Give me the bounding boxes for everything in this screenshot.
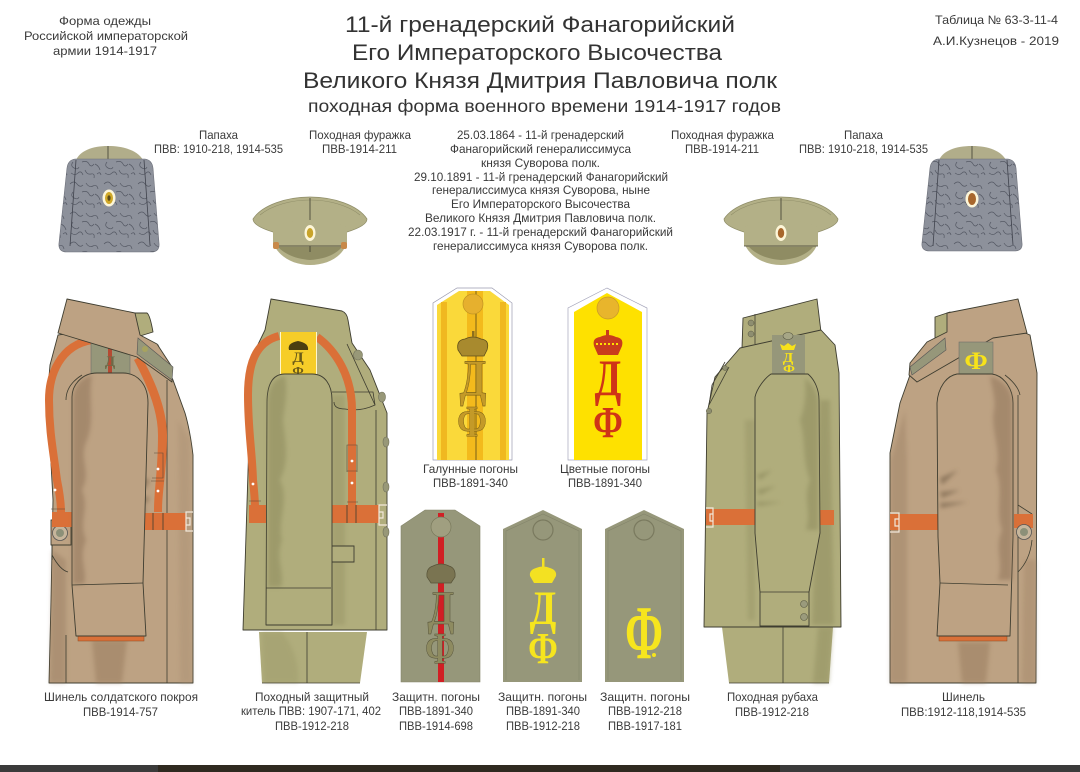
- caption: tunic: ПВВ-1912-218: [275, 719, 349, 733]
- shirt shading: [812, 400, 834, 625]
- label: papakha left: [154, 128, 283, 156]
- collar inner: [133, 313, 153, 336]
- caption: subdued board 3: [600, 690, 690, 733]
- caption: subdued board 2: Защитн. погоны: [498, 690, 587, 704]
- figure: field tunic: Д: [292, 350, 304, 366]
- tunic shading: [332, 395, 345, 625]
- epaulette: [772, 335, 805, 375]
- caption: subdued board 3: Защитн. погоны: [600, 690, 690, 704]
- belt buckle: [890, 513, 899, 532]
- regiment history text: генералиссимуса князя Суворова полк.: [433, 239, 648, 253]
- figure: field shirt: [704, 299, 841, 683]
- cypher: Д: [595, 350, 621, 406]
- belt buckle: [379, 505, 387, 525]
- label: field cap right: [671, 128, 774, 156]
- shoulder board: gold braid: Ф: [457, 396, 487, 446]
- button: [597, 297, 619, 319]
- label: field cap right: Походная фуражка: [671, 128, 774, 142]
- coat seams: [66, 375, 167, 683]
- shoulder board: subdued red stripe: Д: [428, 582, 454, 635]
- sleeve cuff orange: [939, 635, 1007, 641]
- caption: greatcoat right: Шинель: [942, 690, 985, 704]
- strap fittings: [51, 453, 164, 509]
- chest pocket: [332, 392, 375, 410]
- caption: subdued board 3: ПВВ-1917-181: [608, 719, 682, 733]
- back strap: [248, 336, 279, 507]
- caption: coloured board: Цветные погоны: [560, 462, 650, 476]
- tunic buttons: [354, 350, 389, 537]
- back strap: [49, 340, 92, 512]
- shoulder board: subdued red stripe: Ф: [425, 623, 455, 673]
- regiment history text: Его Императорского Высочества: [451, 197, 630, 211]
- caption: subdued board 1: [392, 690, 480, 733]
- title: [303, 12, 781, 116]
- label: field cap left: Походная фуражка: [309, 128, 411, 142]
- shoulder board: subdued yellow cypher: [503, 510, 582, 682]
- epaulette: [280, 332, 317, 375]
- caption: coloured board: [560, 462, 650, 490]
- epaulette: [959, 342, 993, 375]
- label: papakha right: [799, 128, 928, 156]
- figure: field tunic: Ф: [292, 364, 304, 377]
- sleeve: [755, 374, 820, 626]
- caption: braid board: [423, 462, 518, 490]
- sleeve shading: [268, 376, 286, 587]
- regiment history text: 29.10.1891 - 11-й гренадерский Фанагорийский: [414, 170, 668, 184]
- shoulder board: subdued yellow cypher: Д: [530, 582, 556, 635]
- bottom dark bar: [0, 765, 1080, 772]
- coat shading: [890, 410, 1036, 683]
- collar tab: [137, 338, 173, 380]
- rear flap: [1018, 505, 1032, 572]
- epaulette: [91, 342, 130, 376]
- label: field cap left: [309, 128, 411, 156]
- coat seams: [1005, 375, 1020, 683]
- caption: field shirt: Походная рубаха: [727, 690, 818, 704]
- caption: tunic: [241, 690, 381, 733]
- coat shading: [50, 420, 192, 683]
- caption: greatcoat left: ПВВ-1914-757: [83, 705, 158, 719]
- icon: field cap left: [253, 197, 367, 265]
- pocket flap and back button: [51, 520, 71, 572]
- header left: series caption: Форма одежды: [59, 14, 151, 28]
- collar: [742, 299, 821, 348]
- figure: field tunic: [243, 299, 389, 683]
- title: Великого Князя Дмитрия Павловича полк: [303, 68, 777, 93]
- lower pocket: [332, 546, 354, 562]
- caption: subdued board 1: ПВВ-1891-340: [399, 704, 473, 718]
- figure: field shirt: Ф: [783, 362, 795, 375]
- placket and buttons: [706, 362, 729, 414]
- regiment history text: [408, 128, 673, 253]
- tunic seams: [347, 344, 376, 630]
- regiment history text: Фанагорийский генералиссимуса: [450, 142, 631, 156]
- caption: subdued board 1: Защитн. погоны: [392, 690, 480, 704]
- shoulder board: gold braid: [433, 288, 512, 460]
- front strap: [317, 337, 352, 507]
- strap fittings: [249, 445, 358, 502]
- caption: subdued board 3: ПВВ-1912-218: [608, 704, 682, 718]
- shoulder board: subdued F cypher: [605, 510, 684, 682]
- shoulder board: subdued F cypher: Ф: [625, 592, 663, 675]
- figure: soldier greatcoat left: [47, 299, 193, 683]
- sleeve shading: [800, 378, 818, 530]
- regiment history text: князя Суворова полк.: [481, 156, 600, 170]
- crown: [594, 335, 622, 355]
- regiment history text: Великого Князя Дмитрия Павловича полк.: [425, 211, 656, 225]
- shoulder board: coloured: [568, 288, 647, 460]
- label: papakha right: ПВВ: 1910-218, 1914-535: [799, 142, 928, 156]
- caption: greatcoat left: Шинель солдатского покроя: [44, 690, 198, 704]
- crown: [458, 337, 488, 356]
- icon: field cap right: [724, 197, 838, 265]
- rear button: [1016, 524, 1032, 540]
- caption: coloured board: ПВВ-1891-340: [568, 476, 642, 490]
- figure: soldier greatcoat left: Д: [105, 354, 116, 370]
- sleeve: [937, 374, 1013, 636]
- regiment history text: генералиссимуса князя Суворова, ныне: [432, 183, 650, 197]
- figure: greatcoat right: [890, 299, 1037, 683]
- caption: greatcoat left: [44, 690, 198, 719]
- title: походная форма военного времени 1914-1917 годов: [308, 96, 781, 116]
- label: papakha right: Папаха: [844, 128, 883, 142]
- shoulder board: coloured: Ф: [593, 397, 623, 447]
- caption: subdued board 2: ПВВ-1912-218: [506, 719, 580, 733]
- belt segments: [249, 505, 266, 523]
- label: field cap right: ПВВ-1914-211: [685, 142, 759, 156]
- caption: subdued board 1: ПВВ-1914-698: [399, 719, 473, 733]
- belt buckle: [706, 508, 713, 527]
- sleeve: [72, 373, 148, 636]
- icon: papakha right: [922, 146, 1022, 251]
- header left: series caption: [24, 14, 188, 58]
- caption: tunic: Походный защитный: [255, 690, 369, 704]
- coat body: [47, 330, 193, 683]
- collar: [58, 299, 172, 382]
- shoulder board: subdued yellow cypher: Ф: [528, 623, 558, 673]
- collar: [909, 299, 1027, 382]
- coat body: [890, 330, 1037, 683]
- belt segments: [706, 509, 755, 525]
- caption: subdued board 2: [498, 690, 587, 733]
- sleeve shading: [73, 375, 92, 584]
- title: 11-й гренадерский Фанагорийский: [345, 12, 735, 37]
- cypher: Д: [460, 350, 486, 406]
- header left: series caption: Российской императорской: [24, 29, 188, 43]
- shoulder board: subdued red stripe: [401, 510, 480, 682]
- header right: table number: А.И.Кузнецов - 2019: [933, 34, 1059, 48]
- trousers: [259, 632, 367, 683]
- header right: table number: [933, 13, 1059, 48]
- caption: subdued board 2: ПВВ-1891-340: [506, 704, 580, 718]
- regiment history text: 25.03.1864 - 11-й гренадерский: [457, 128, 624, 142]
- caption: tunic: китель ПВВ: 1907-171, 402: [241, 704, 381, 718]
- regiment history text: 22.03.1917 г. - 11-й гренадерский Фанагорийский: [408, 225, 673, 239]
- collar tab: [910, 338, 946, 375]
- button: [463, 294, 483, 314]
- caption: braid board: Галунные погоны: [423, 462, 518, 476]
- coat inner collar: [935, 312, 950, 338]
- label: field cap left: ПВВ-1914-211: [322, 142, 397, 156]
- caption: field shirt: [727, 690, 818, 719]
- sleeve shading: [990, 376, 1012, 580]
- shirt body: [704, 330, 841, 627]
- sleeve: [266, 374, 332, 625]
- header right: table number: Таблица № 63-3-11-4: [935, 13, 1058, 27]
- icon: papakha left: [59, 146, 159, 252]
- belt buckle: [186, 512, 193, 531]
- tunic body with collar: [243, 299, 387, 630]
- label: papakha left: ПВВ: 1910-218, 1914-535: [154, 142, 283, 156]
- caption: field shirt: ПВВ-1912-218: [735, 705, 809, 719]
- caption: greatcoat right: [901, 690, 1026, 719]
- trousers: [722, 627, 833, 683]
- label: papakha left: Папаха: [199, 128, 238, 142]
- figure: field shirt: Д: [783, 351, 793, 366]
- front strap: [134, 356, 167, 512]
- figure: greatcoat right: Ф: [964, 346, 988, 375]
- caption: braid board: ПВВ-1891-340: [433, 476, 508, 490]
- header left: series caption: армии 1914-1917: [53, 44, 157, 58]
- belt segments: [890, 514, 940, 530]
- sleeve cuff orange: [78, 635, 144, 641]
- caption: greatcoat right: ПВВ:1912-118,1914-535: [901, 705, 1026, 719]
- title: Его Императорского Высочества: [352, 40, 723, 65]
- belt segments: [52, 512, 72, 527]
